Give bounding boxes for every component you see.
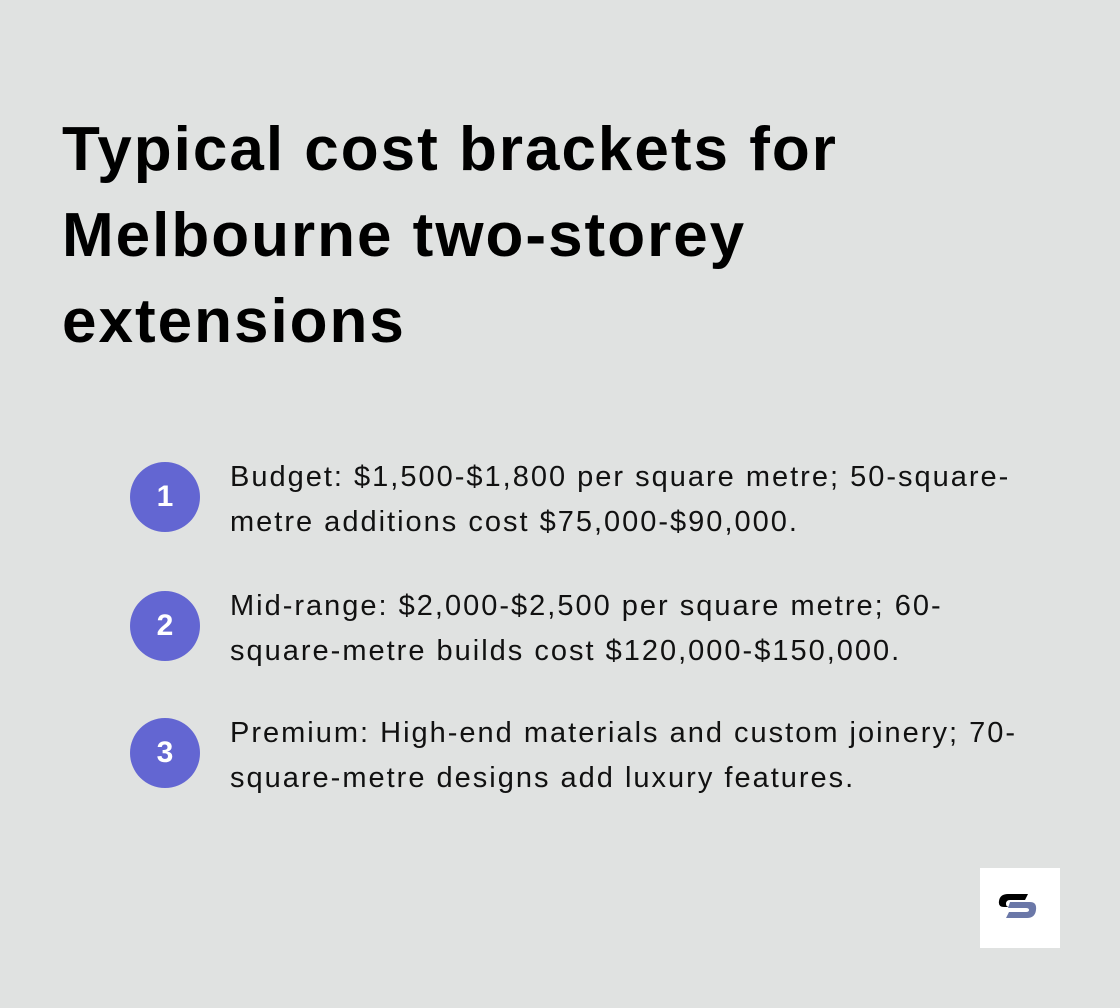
text 2: Mid-range: $2,000-$2,500 per square metre; 60- <box>230 590 943 622</box>
number badge 2: 2 <box>157 609 173 642</box>
text 1: metre additions cost $75,000-$90,000. <box>230 506 799 538</box>
number badge 3: 3 <box>157 736 173 769</box>
logo <box>980 868 1060 948</box>
text 2: square-metre builds cost $120,000-$150,000. <box>230 635 901 667</box>
text 1 <box>230 461 1010 538</box>
text 3: Premium: High-end materials and custom joinery; 70- <box>230 717 1017 749</box>
title <box>62 115 838 356</box>
item 3 <box>130 717 1017 794</box>
title: Melbourne two-storey <box>62 201 746 270</box>
number badge 1: 1 <box>157 480 173 513</box>
item 1 <box>130 461 1010 538</box>
number badge 2 <box>130 591 200 661</box>
text 1: Budget: $1,500-$1,800 per square metre; 50-square- <box>230 461 1010 493</box>
text 2 <box>230 590 943 667</box>
text 3: square-metre designs add luxury features. <box>230 762 855 794</box>
title: Typical cost brackets for <box>62 115 838 184</box>
title: extensions <box>62 287 406 356</box>
item 2 <box>130 590 943 667</box>
number badge 3 <box>130 718 200 788</box>
text 3 <box>230 717 1017 794</box>
number badge 1 <box>130 462 200 532</box>
